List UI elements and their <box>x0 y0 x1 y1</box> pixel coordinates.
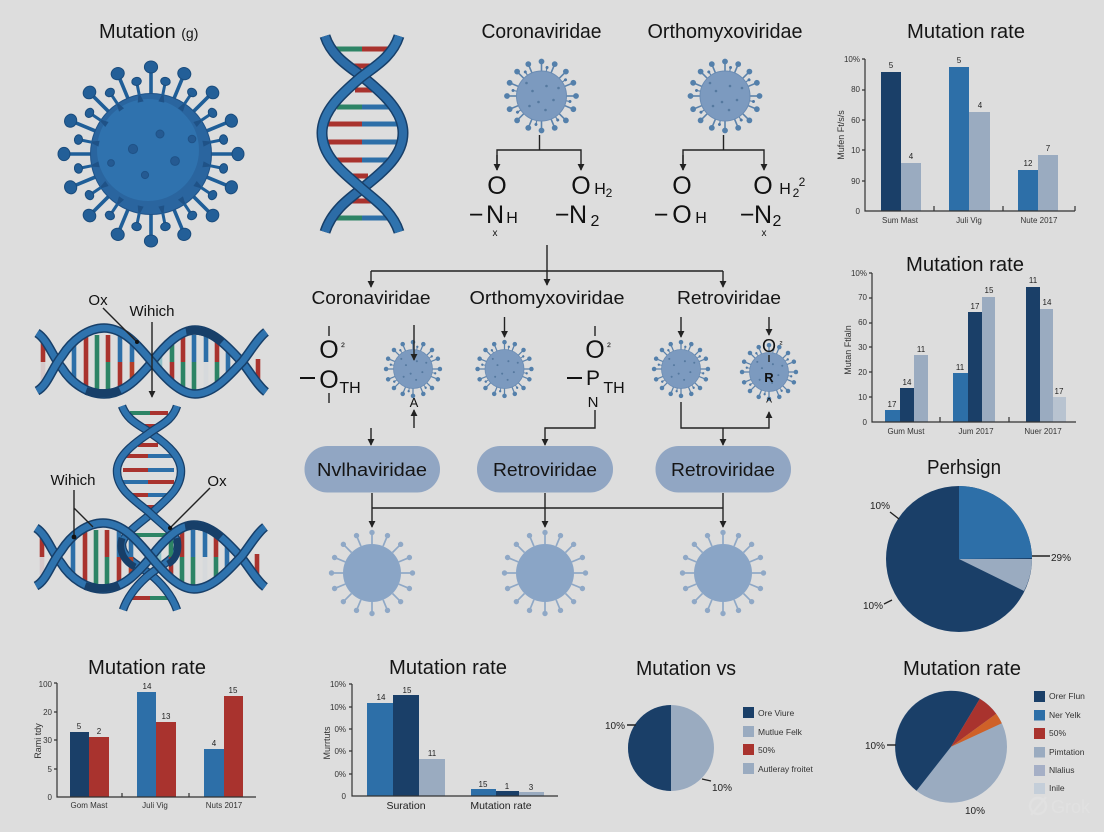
chart: top right bar chart: 7 <box>1046 144 1051 153</box>
formula: coronaviridae: − <box>555 201 569 229</box>
formula: row middle: P <box>586 367 600 390</box>
chart: top right bar chart: Mufen Ft/s/s <box>836 110 846 160</box>
chart: middle right bar chart: 10% <box>851 269 867 278</box>
heading: row coronaviridae: Coronaviridae <box>312 287 430 308</box>
formula: coronaviridae: 2 <box>606 186 613 200</box>
chart: half pie with legend: Autleray froitet <box>758 764 813 774</box>
chart: middle right bar chart: 15 <box>985 286 994 295</box>
heading: row orthomyxoviridae: Orthomyxoviridae <box>470 287 624 308</box>
callout: upper Wihich: Wihich <box>129 303 175 320</box>
chart: top right bar chart: 0 <box>856 207 861 216</box>
chart: half pie with legend: Mutation vs <box>636 658 736 680</box>
chart: middle right bar chart: 17 <box>1055 387 1064 396</box>
arrow: coronaviridae left tip <box>496 155 498 170</box>
icon: orthomyxoviridae virus <box>688 59 762 133</box>
heading: coronaviridae: Coronaviridae <box>482 21 602 43</box>
icon: bottom virus 2 <box>502 530 588 616</box>
chart: bottom centre bar chart: Mutation rate <box>470 800 532 812</box>
watermark: Grok <box>1030 797 1091 817</box>
chart: middle right bar chart: 20 <box>858 368 868 377</box>
callout: upper Ox <box>88 292 139 344</box>
chart: half pie with legend: Mutlue Felk <box>758 727 803 737</box>
arrow: into row virus 2 <box>504 317 506 337</box>
callout: lower Ox <box>168 473 227 530</box>
chart: top right bar chart: 12 <box>1024 159 1033 168</box>
formula: coronaviridae: O <box>571 172 591 200</box>
formula: orthomyxoviridae: O <box>672 172 692 200</box>
chart: multi-slice pie with legend: Mutation rate <box>903 658 1021 680</box>
chart: middle right bar chart: Nuer 2017 <box>1024 427 1062 436</box>
callout: lower Wihich: Wihich <box>50 472 96 489</box>
pill: left <box>304 446 440 492</box>
chart: top right bar chart: 10% <box>844 55 860 64</box>
arrow: formula to middle pill <box>545 410 595 445</box>
chart: bottom centre bar chart: 0% <box>334 747 346 756</box>
chart: bottom centre bar chart: 1 <box>505 782 510 791</box>
arrow: branch to right pill <box>722 428 724 445</box>
watermark: Grok: Grok <box>1051 797 1091 817</box>
formula: coronaviridae: − <box>469 201 483 229</box>
chart: multi-slice pie with legend: Nlalius <box>1049 765 1075 775</box>
chart: Perhsign pie <box>863 457 1071 632</box>
chart: top right bar chart: 10 <box>851 146 861 155</box>
formula: row left <box>300 326 361 403</box>
formula: orthomyxoviridae: 2 <box>799 175 806 189</box>
chart: middle right bar chart: 14 <box>1043 298 1052 307</box>
chart: bottom centre bar chart: 10% <box>330 680 346 689</box>
chart: bottom left bar chart: Gom Mast <box>71 801 108 810</box>
icon: large virus <box>58 61 244 247</box>
chart: middle right bar chart: Mutan Ftlaln <box>843 325 853 375</box>
icon: dark overlap at DNA crossing <box>121 538 178 567</box>
icon: row virus 4 with formula <box>740 336 798 410</box>
formula: coronaviridae: N <box>569 201 587 229</box>
formula: orthomyxoviridae: 2 <box>793 186 800 200</box>
chart: middle right bar chart: 60 <box>858 318 868 327</box>
heading: row retroviridae: Retroviridae <box>677 287 781 308</box>
formula: coronaviridae: 2 <box>591 213 600 230</box>
icon: upper horizontal DNA <box>37 328 266 394</box>
formula: row middle: O <box>585 336 605 364</box>
chart: top right bar chart: 60 <box>851 116 861 125</box>
arrow: into row virus 3 <box>680 317 682 337</box>
chart: top right bar chart: 4 <box>909 152 914 161</box>
chart: middle right bar chart: 17 <box>971 302 980 311</box>
chart: bottom left bar chart: Nuts 2017 <box>206 801 243 810</box>
chart: bottom centre bar chart: 15 <box>479 780 488 789</box>
chart: bottom centre bar chart: 0% <box>334 725 346 734</box>
chart: middle right bar chart: 0 <box>863 418 868 427</box>
pill: left: Nvlhaviridae <box>317 459 427 480</box>
callout: upper Wihich <box>129 303 175 397</box>
chart: top right bar chart: 90 <box>851 177 861 186</box>
chart: bottom centre bar chart: 3 <box>529 783 534 792</box>
chart: multi-slice pie with legend: Orer Flun <box>1049 691 1085 701</box>
formula: coronaviridae: O <box>487 172 507 200</box>
chart: top right bar chart: Mutation rate <box>907 21 1025 43</box>
callout: lower Wihich <box>50 472 96 539</box>
chart: top right bar chart: 80 <box>851 85 861 94</box>
chart: multi-slice pie with legend <box>865 658 1085 817</box>
formula: orthomyxoviridae <box>654 172 806 239</box>
chart: bottom left bar chart: Rami tdy <box>33 723 43 759</box>
arrow: up to virus 1 <box>413 410 415 428</box>
arrow: into row virus 1 <box>413 325 415 360</box>
arrow: to left pill <box>370 428 372 445</box>
formula: coronaviridae: H <box>594 181 606 198</box>
chart: bottom centre bar chart: 11 <box>428 749 437 758</box>
chart: half pie with legend: Ore Viure <box>758 708 794 718</box>
formula: row middle: N <box>588 394 598 411</box>
icon: row virus 3 <box>652 340 710 398</box>
arrow: orthomyxoviridae left tip <box>682 155 684 170</box>
arrow: orthomyxoviridae branch <box>683 135 764 170</box>
chart: top right bar chart: Juli Vig <box>956 216 982 225</box>
chart: Perhsign pie: 10% <box>870 501 890 512</box>
chart: half pie with legend: 10% <box>605 721 625 732</box>
chart: bottom left bar chart: 5 <box>48 765 53 774</box>
formula: row left: ² <box>341 341 345 353</box>
chart: middle right bar chart: Jum 2017 <box>958 427 994 436</box>
chart: bottom left bar chart: 100 <box>39 680 53 689</box>
chart: middle right bar chart: Gum Must <box>888 427 925 436</box>
chart: middle right bar chart: 11 <box>917 345 926 354</box>
formula: coronaviridae <box>469 172 613 239</box>
chart: middle right bar chart: 70 <box>858 293 868 302</box>
formula: orthomyxoviridae: − <box>654 201 668 229</box>
heading: mutation: Mutation (g) <box>99 21 198 43</box>
formula: row middle <box>567 326 625 411</box>
chart: top right bar chart <box>836 21 1075 225</box>
icon: row virus 1 <box>384 340 442 398</box>
chart: bottom left bar chart: 15 <box>229 686 238 695</box>
icon: lower horizontal DNA <box>36 523 265 589</box>
chart: bottom left bar chart: Juli Vig <box>142 801 168 810</box>
chart: bottom centre bar chart: Suration <box>386 800 426 812</box>
icon: vertical DNA helix <box>322 36 403 232</box>
formula: orthomyxoviridae: − <box>740 201 754 229</box>
chart: bottom left bar chart: 30 <box>43 736 53 745</box>
chart: bottom centre bar chart <box>322 657 558 812</box>
chart: middle right bar chart <box>843 254 1076 436</box>
chart: middle right bar chart: 11 <box>1029 276 1038 285</box>
formula: orthomyxoviridae: H <box>695 210 707 227</box>
pill: middle <box>477 446 613 492</box>
chart: top right bar chart: Sum Mast <box>882 216 919 225</box>
chart: bottom left bar chart: 5 <box>77 722 82 731</box>
formula: orthomyxoviridae: O <box>753 172 773 200</box>
flow connector: pills to bottom viruses <box>372 493 723 527</box>
chart: middle right bar chart: 14 <box>903 378 912 387</box>
chart: middle right bar chart: 10 <box>858 393 868 402</box>
icon: row virus 4 with formula: O <box>762 336 776 356</box>
chart: bottom centre bar chart: 10% <box>330 703 346 712</box>
chart: top right bar chart: 4 <box>978 101 983 110</box>
chart: bottom left bar chart: 0 <box>48 793 53 802</box>
formula: orthomyxoviridae: O <box>672 201 692 229</box>
callout: upper Ox: Ox <box>88 292 108 309</box>
chart: bottom left bar chart <box>33 657 256 810</box>
chart: bottom centre bar chart: Mutation rate <box>389 657 507 679</box>
chart: bottom centre bar chart: 0% <box>334 770 346 779</box>
formula: row middle: ² <box>607 341 611 353</box>
formula: coronaviridae: N <box>486 201 504 229</box>
chart: bottom centre bar chart: 15 <box>403 686 412 695</box>
chart: Perhsign pie: Perhsign <box>927 457 1001 479</box>
icon: bottom virus 1 <box>329 530 415 616</box>
chart: multi-slice pie with legend: Ner Yelk <box>1049 710 1081 720</box>
icon: row virus 4 with formula: ^ <box>766 395 773 410</box>
chart: half pie with legend: 50% <box>758 745 775 755</box>
arrow: coronaviridae branch <box>497 135 581 170</box>
chart: bottom left bar chart: 4 <box>212 739 217 748</box>
icon: row virus 4 with formula: ² <box>780 339 782 349</box>
formula: row middle: TH <box>603 380 625 397</box>
chart: top right bar chart: Nute 2017 <box>1021 216 1058 225</box>
chart: bottom left bar chart: Mutation rate <box>88 657 206 679</box>
pill: right <box>656 446 791 492</box>
chart: multi-slice pie with legend: Inile <box>1049 783 1065 793</box>
chart: top right bar chart: 5 <box>957 56 962 65</box>
chart: multi-slice pie with legend: 50% <box>1049 728 1066 738</box>
arrow: into row virus 4 <box>768 317 770 335</box>
icon: left vertical DNA <box>117 406 181 610</box>
label: A under virus 1: A <box>410 395 419 410</box>
chart: middle right bar chart: 30 <box>858 343 868 352</box>
chart: Perhsign pie: 29% <box>1051 553 1071 564</box>
icon: row virus 2 <box>475 340 534 398</box>
chart: multi-slice pie with legend: Pimtation <box>1049 747 1085 757</box>
chart: middle right bar chart: 11 <box>956 363 965 372</box>
icon: bottom virus 3 <box>680 530 766 616</box>
icon: coronaviridae virus <box>504 59 579 133</box>
formula: row left: TH <box>339 380 361 397</box>
pill: right: Retroviridae <box>671 459 775 480</box>
formula: orthomyxoviridae: x <box>762 228 766 239</box>
arrow: virus 3 branch to virus 4 <box>681 402 769 428</box>
chart: bottom left bar chart: 14 <box>143 682 152 691</box>
chart: bottom centre bar chart: Murrtuts <box>322 726 332 760</box>
formula: orthomyxoviridae: N <box>754 201 772 229</box>
chart: Perhsign pie: 10% <box>863 601 883 612</box>
callout: lower Ox: Ox <box>207 473 227 490</box>
formula: orthomyxoviridae: H <box>779 181 791 198</box>
chart: bottom centre bar chart: 14 <box>377 693 386 702</box>
icon: row virus 4 with formula: R <box>764 370 774 385</box>
chart: multi-slice pie with legend: 10% <box>865 741 885 752</box>
formula: coronaviridae: H <box>506 210 518 227</box>
chart: top right bar chart: 5 <box>889 61 894 70</box>
formula: row left: O <box>319 336 339 364</box>
formula: orthomyxoviridae: 2 <box>773 213 782 230</box>
heading: orthomyxoviridae: Orthomyxoviridae <box>648 21 802 43</box>
formula: coronaviridae: x <box>492 228 498 239</box>
chart: bottom left bar chart: 2 <box>97 727 102 736</box>
chart: bottom centre bar chart: 0 <box>342 792 347 801</box>
formula: row left: O <box>319 366 339 394</box>
chart: middle right bar chart: 17 <box>888 400 897 409</box>
flow connector: top to second row <box>371 245 723 287</box>
pill: middle: Retroviridae <box>493 459 597 480</box>
chart: multi-slice pie with legend: 10% <box>965 806 985 817</box>
chart: half pie with legend: 10% <box>712 783 732 794</box>
chart: bottom left bar chart: 20 <box>43 708 53 717</box>
chart: middle right bar chart: Mutation rate <box>906 254 1024 276</box>
chart: half pie with legend <box>605 658 813 794</box>
chart: bottom left bar chart: 13 <box>162 712 171 721</box>
